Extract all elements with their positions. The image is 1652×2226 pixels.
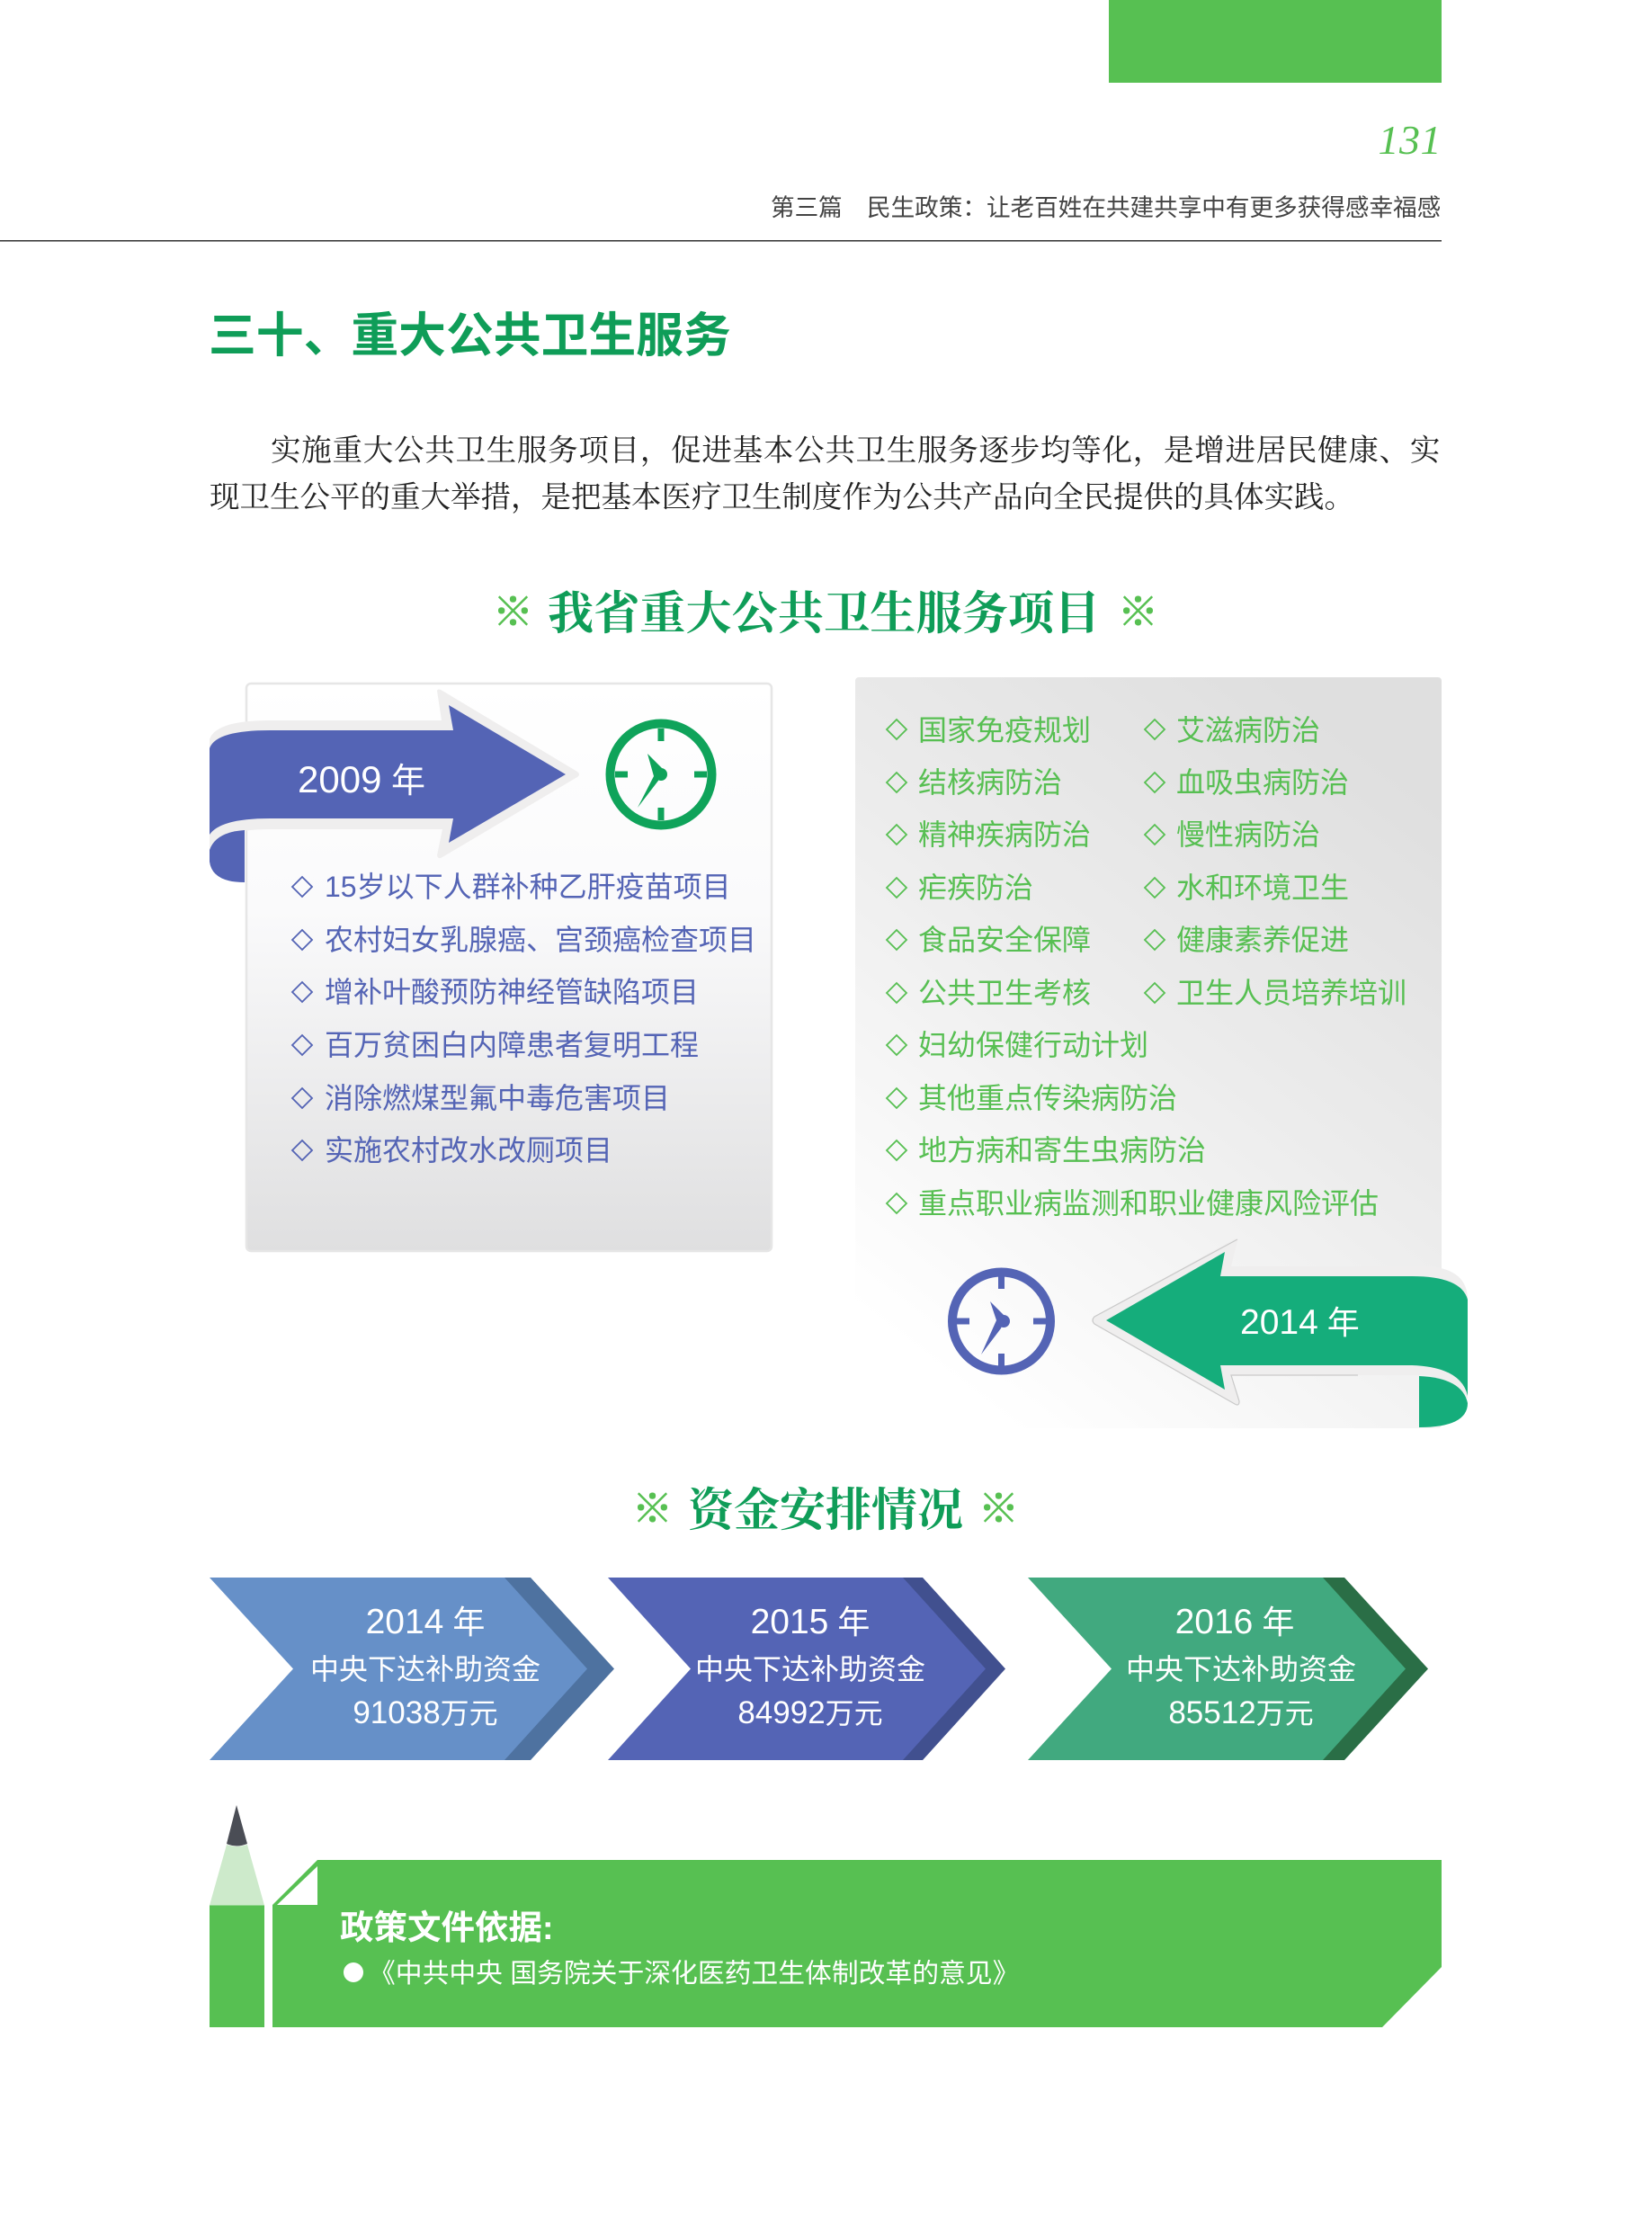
list: 2014 items left column: 结核病防治: [918, 766, 1062, 799]
chevron: 2015 funding: [608, 1578, 1005, 1760]
intro paragraph: 现卫生公平的重大举措，是把基本医疗卫生制度作为公共产品向全民提供的具体实践。: [210, 481, 1354, 514]
chevron: 2016 funding: 85512万元: [1168, 1695, 1314, 1730]
title: 三十、重大公共卫生服务: [209, 309, 731, 362]
banner: policy basis: [272, 1860, 1442, 2027]
heading: funding: ※: [632, 1486, 673, 1532]
list: 2009 items: [292, 877, 312, 1160]
icon: blue clock: [952, 1272, 1050, 1371]
icon: pencil: [210, 1805, 264, 2027]
heading: funding: 资金安排情况: [688, 1473, 963, 1540]
running header: 民生政策：让老百姓在共建共享中有更多获得感幸福感: [867, 194, 1441, 221]
intro paragraph: [210, 434, 1441, 514]
chevron: 2016 funding: 中央下达补助资金: [1126, 1653, 1356, 1685]
banner heading: 政策文件依据:: [340, 1909, 554, 1946]
list: 2014 items left column: 妇幼保健行动计划: [918, 1029, 1148, 1061]
list: 2014 items left column: 国家免疫规划: [918, 714, 1091, 746]
heading: key projects: ※: [1118, 589, 1158, 635]
panel: 2009 projects: 增补叶酸预防神经管缺陷项目: [325, 976, 699, 1008]
arrow: 2009: 2009 年: [298, 758, 425, 800]
icon: green clock: [610, 723, 712, 826]
chevron: 2014 funding: [210, 1578, 614, 1760]
list: 2014 items right column: 水和环境卫生: [1176, 872, 1349, 904]
chevron: 2016 funding: 2016 年: [1175, 1603, 1294, 1641]
list: 2014 items left column: 精神疾病防治: [918, 818, 1091, 851]
list: 2014 items left column: 公共卫生考核: [918, 977, 1091, 1009]
panel: 2009 projects: 农村妇女乳腺癌、宫颈癌检查项目: [325, 924, 756, 956]
list: 2014 items right column: 艾滋病防治: [1176, 714, 1320, 746]
card background: [246, 684, 772, 1251]
panel: 2009 projects: 百万贫困白内障患者复明工程: [325, 1029, 699, 1061]
list: 2014 items right column: 卫生人员培养培训: [1176, 977, 1406, 1009]
bullet: [344, 1962, 363, 1982]
arrow: 2014: 2014 年: [1240, 1303, 1360, 1342]
arrow: 2009: [210, 689, 579, 882]
top green tab: [1109, 0, 1442, 83]
panel: 2009 projects: 实施农村改水改厕项目: [325, 1134, 612, 1167]
chevron: 2014 funding: 91038万元: [353, 1695, 498, 1730]
list: 2014 items left column: 食品安全保障: [918, 924, 1091, 956]
panel background: [855, 677, 1442, 1428]
arrow: 2014: [1093, 1238, 1468, 1427]
chevron: 2015 funding: 84992万元: [737, 1695, 883, 1730]
panel: 2009 projects: 消除燃煤型氟中毒危害项目: [325, 1082, 670, 1114]
panel: 2009 projects: 15岁以下人群补种乙肝疫苗项目: [325, 871, 731, 903]
heading: key projects: 我省重大公共卫生服务项目: [548, 576, 1100, 642]
list: 2014 items right column: 健康素养促进: [1176, 924, 1349, 956]
list: 2014 items right column: 慢性病防治: [1176, 818, 1320, 851]
list: 2014 items left column: [887, 714, 1379, 1220]
list: 2014 items left column: 疟疾防治: [918, 872, 1033, 904]
chevron: 2015 funding: 2015 年: [751, 1603, 870, 1641]
list: 2014 items left column: 地方病和寄生虫病防治: [918, 1134, 1206, 1167]
chevron: 2016 funding: [1028, 1578, 1428, 1760]
page number: 131: [1378, 117, 1442, 163]
folded corner: [277, 1866, 317, 1905]
heading: key projects: ※: [493, 589, 533, 635]
chevron: 2014 funding: 2014 年: [366, 1603, 485, 1641]
chevron: 2015 funding: 中央下达补助资金: [695, 1653, 925, 1685]
panel: 2009 projects: [210, 684, 772, 1251]
intro paragraph: 实施重大公共卫生服务项目，促进基本公共卫生服务逐步均等化，是增进居民健康、实: [271, 434, 1441, 468]
list: 2014 items right column: [1145, 714, 1406, 1009]
list: 2014 items left column: 其他重点传染病防治: [918, 1082, 1177, 1114]
chevron: 2014 funding: 中央下达补助资金: [310, 1653, 540, 1685]
running header: 第三篇: [771, 194, 843, 221]
heading: funding: ※: [978, 1486, 1019, 1532]
list: 2014 items right column: 血吸虫病防治: [1176, 766, 1349, 799]
panel: 2014 projects: [855, 677, 1468, 1428]
policy document: 《中共中央 国务院关于深化医药卫生体制改革的意见》: [369, 1959, 1019, 1989]
list: 2014 items left column: 重点职业病监测和职业健康风险评估: [918, 1187, 1379, 1220]
